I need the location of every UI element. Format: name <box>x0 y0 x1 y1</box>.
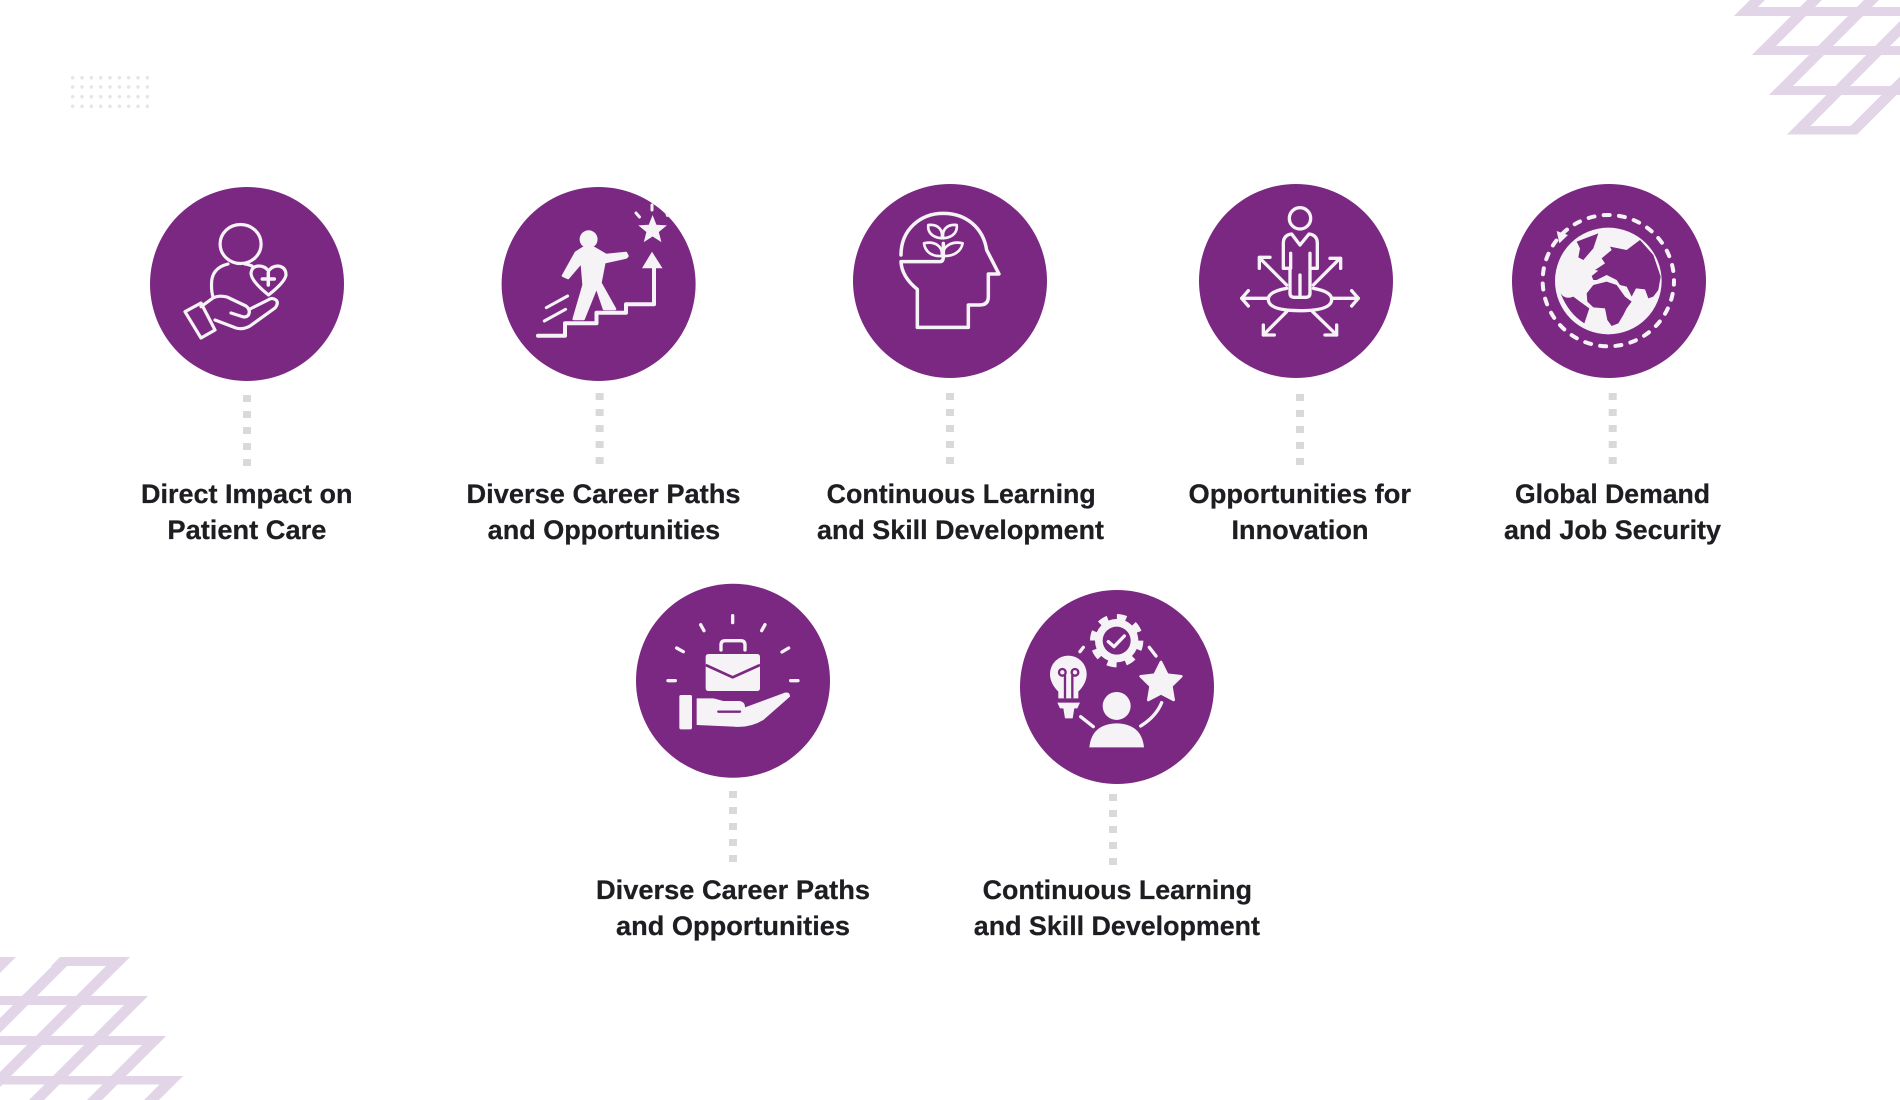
icon: hand holding briefcase <box>668 616 798 729</box>
label: Diverse Career Paths <box>596 875 870 905</box>
purple circle <box>853 184 1047 378</box>
purple circle <box>502 187 696 381</box>
dotted connector <box>243 395 251 466</box>
label: Continuous Learning <box>827 479 1096 509</box>
purple circle <box>636 584 830 778</box>
dotted connector <box>729 791 737 862</box>
label: and Opportunities <box>488 515 720 545</box>
dotted connector <box>596 393 604 464</box>
icon: person with radiating arrows <box>1242 208 1358 335</box>
purple circle <box>1512 184 1706 378</box>
label: Opportunities for <box>1188 479 1411 509</box>
icon: globe with dashed orbit <box>1543 215 1674 346</box>
label: Diverse Career Paths <box>466 479 740 509</box>
dotted connector <box>1109 794 1117 865</box>
label: and Skill Development <box>974 911 1260 941</box>
label: and Skill Development <box>817 515 1104 545</box>
decorative dot grid <box>71 76 149 108</box>
decorative lattice: bottom left <box>0 957 183 1100</box>
icon: person with gear, bulb and star <box>1050 617 1181 747</box>
icon: hand holding person with heart <box>185 224 286 338</box>
label: Innovation <box>1232 515 1368 545</box>
label <box>974 875 1260 941</box>
label <box>817 479 1104 545</box>
label: Continuous Learning <box>983 875 1252 905</box>
label: Patient Care <box>167 515 326 545</box>
panel: Diverse Career Paths and Opportunities (bottom) <box>596 584 870 941</box>
dotted connector <box>946 393 954 464</box>
purple circle <box>1199 184 1393 378</box>
dotted connector <box>1609 393 1617 464</box>
label: Global Demand <box>1515 479 1710 509</box>
icon: climbing stairs to a star <box>538 205 668 336</box>
panel: Direct Impact on Patient Care <box>141 187 352 545</box>
label <box>1504 479 1721 545</box>
purple circle <box>150 187 344 381</box>
label: and Opportunities <box>616 911 850 941</box>
panel: Continuous Learning and Skill Development (top) <box>817 184 1104 545</box>
panel: Continuous Learning and Skill Development (bottom) <box>974 590 1260 941</box>
purple circle <box>1020 590 1214 784</box>
panel: Opportunities for Innovation <box>1188 184 1411 545</box>
label: and Job Security <box>1504 515 1721 545</box>
panel: Diverse Career Paths and Opportunities (top) <box>466 187 740 545</box>
label <box>596 875 870 941</box>
label <box>1188 479 1411 545</box>
label <box>141 479 352 545</box>
dotted connector <box>1296 394 1304 465</box>
panel: Global Demand and Job Security <box>1504 184 1721 545</box>
icon: head with growing plant <box>901 213 999 327</box>
decorative lattice: top right <box>1734 0 1900 134</box>
label <box>466 479 740 545</box>
label: Direct Impact on <box>141 479 352 509</box>
